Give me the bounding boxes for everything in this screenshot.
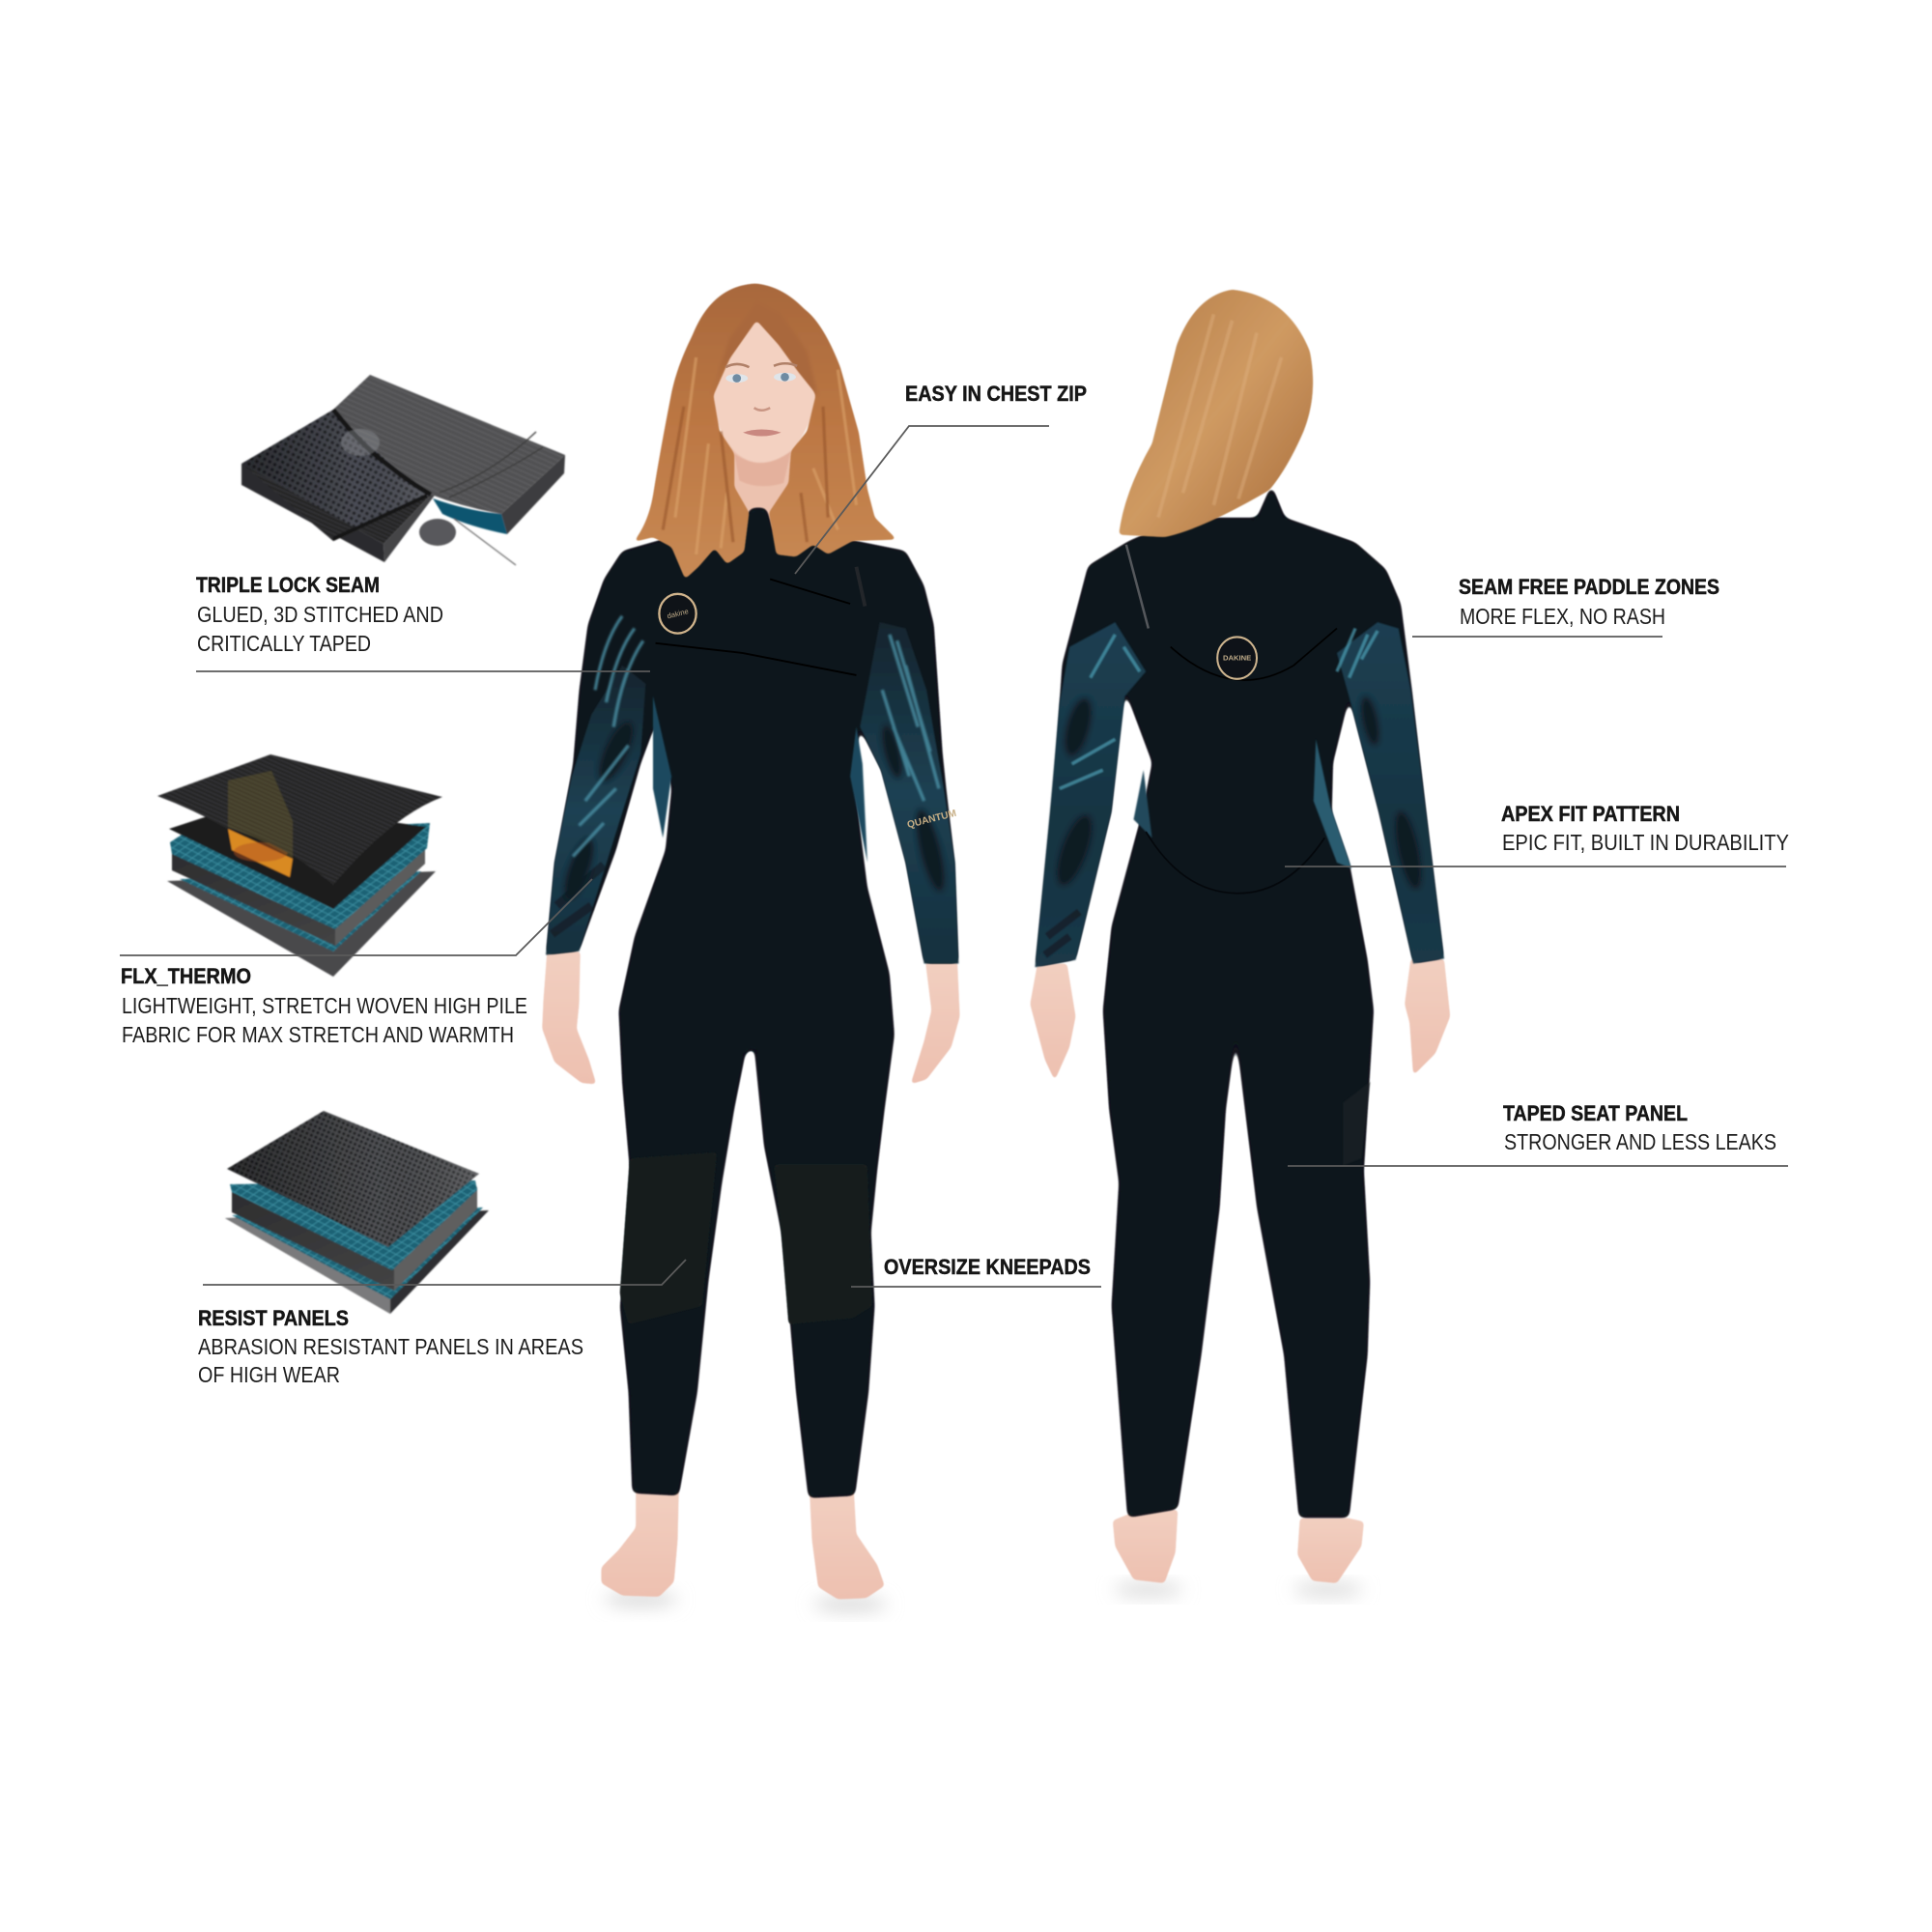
back seams	[1126, 545, 1337, 894]
heading: oversize kneepads: OVERSIZE KNEEPADS	[884, 1255, 1091, 1279]
hair back	[1119, 290, 1313, 537]
heading and text: apex fit pattern	[1501, 802, 1789, 855]
leader line: seam free paddle zones	[1412, 636, 1662, 638]
figure: model back view	[1030, 290, 1450, 1597]
figure: model front view	[542, 283, 960, 1611]
heading and text: flx thermo: FABRIC FOR MAX STRETCH AND WARMTH	[122, 1022, 514, 1047]
heading and text: taped seat panel	[1503, 1101, 1776, 1154]
heading and text: apex fit pattern: EPIC FIT, BUILT IN DURABILITY	[1502, 830, 1789, 855]
heading and text: apex fit pattern: APEX FIT PATTERN	[1501, 802, 1680, 826]
swatch: triple lock seam material block	[242, 375, 565, 565]
heading and text: triple lock seam: CRITICALLY TAPED	[197, 631, 371, 656]
heading and text: flx thermo	[121, 964, 527, 1047]
logo badge front: dakine	[667, 607, 690, 620]
hair strands back	[1158, 314, 1282, 518]
swatch: resist panels layered fabric	[225, 1111, 489, 1314]
foot shadows front	[604, 1592, 887, 1611]
heading and text: triple lock seam: GLUED, 3D STITCHED AND	[197, 602, 443, 627]
heading and text: triple lock seam	[196, 573, 443, 656]
seat panel back	[1343, 1082, 1370, 1166]
heading and text: seam free paddle zones	[1459, 575, 1719, 629]
heading and text: flx thermo: LIGHTWEIGHT, STRETCH WOVEN HIGH PILE	[122, 993, 527, 1018]
hair front	[634, 283, 897, 579]
heading and text: flx thermo: FLX_THERMO	[121, 964, 251, 988]
heading and text: resist panels: ABRASION RESISTANT PANELS IN AREAS	[198, 1334, 583, 1359]
wetsuit body back	[1035, 484, 1444, 1518]
leader line: oversize kneepads	[851, 1286, 1101, 1288]
heading and text: resist panels: OF HIGH WEAR	[198, 1362, 340, 1387]
front sleeve prints	[546, 616, 958, 963]
hands and feet back	[1030, 958, 1450, 1583]
back sleeve prints	[1035, 622, 1444, 967]
heading and text: seam free paddle zones: SEAM FREE PADDLE ZONES	[1459, 575, 1719, 599]
leader line: apex fit pattern	[1285, 866, 1786, 867]
heading and text: triple lock seam: TRIPLE LOCK SEAM	[196, 573, 380, 597]
sleeve wordmark: QUANTUM	[906, 809, 957, 831]
logo badge front	[659, 594, 696, 634]
heading and text: resist panels: RESIST PANELS	[198, 1306, 349, 1330]
leader line: taped seat panel	[1288, 1165, 1788, 1167]
leader line: resist panels	[203, 1260, 686, 1285]
front chest panel seams and zip	[656, 567, 865, 675]
hands and feet front	[542, 952, 960, 1600]
leader line: easy in chest zip	[795, 426, 1049, 574]
leader line: triple lock seam	[196, 670, 650, 672]
logo badge back: DAKINE	[1223, 654, 1251, 663]
leader line: flx thermo	[120, 879, 592, 955]
heading: easy in chest zip: EASY IN CHEST ZIP	[905, 382, 1087, 406]
logo badge back	[1217, 637, 1257, 679]
hair strands front	[663, 357, 856, 554]
foot shadows back	[1114, 1582, 1363, 1597]
neck and face	[708, 313, 818, 524]
heading and text: resist panels	[198, 1306, 583, 1387]
kneepads front	[620, 1152, 872, 1324]
swatch: flx thermo layered fabric	[157, 754, 442, 977]
wetsuit body front	[546, 508, 958, 1498]
heading and text: seam free paddle zones: MORE FLEX, NO RASH	[1460, 604, 1665, 629]
heading and text: taped seat panel: TAPED SEAT PANEL	[1503, 1101, 1688, 1125]
heading and text: taped seat panel: STRONGER AND LESS LEAKS	[1504, 1129, 1776, 1154]
face details	[725, 363, 797, 437]
